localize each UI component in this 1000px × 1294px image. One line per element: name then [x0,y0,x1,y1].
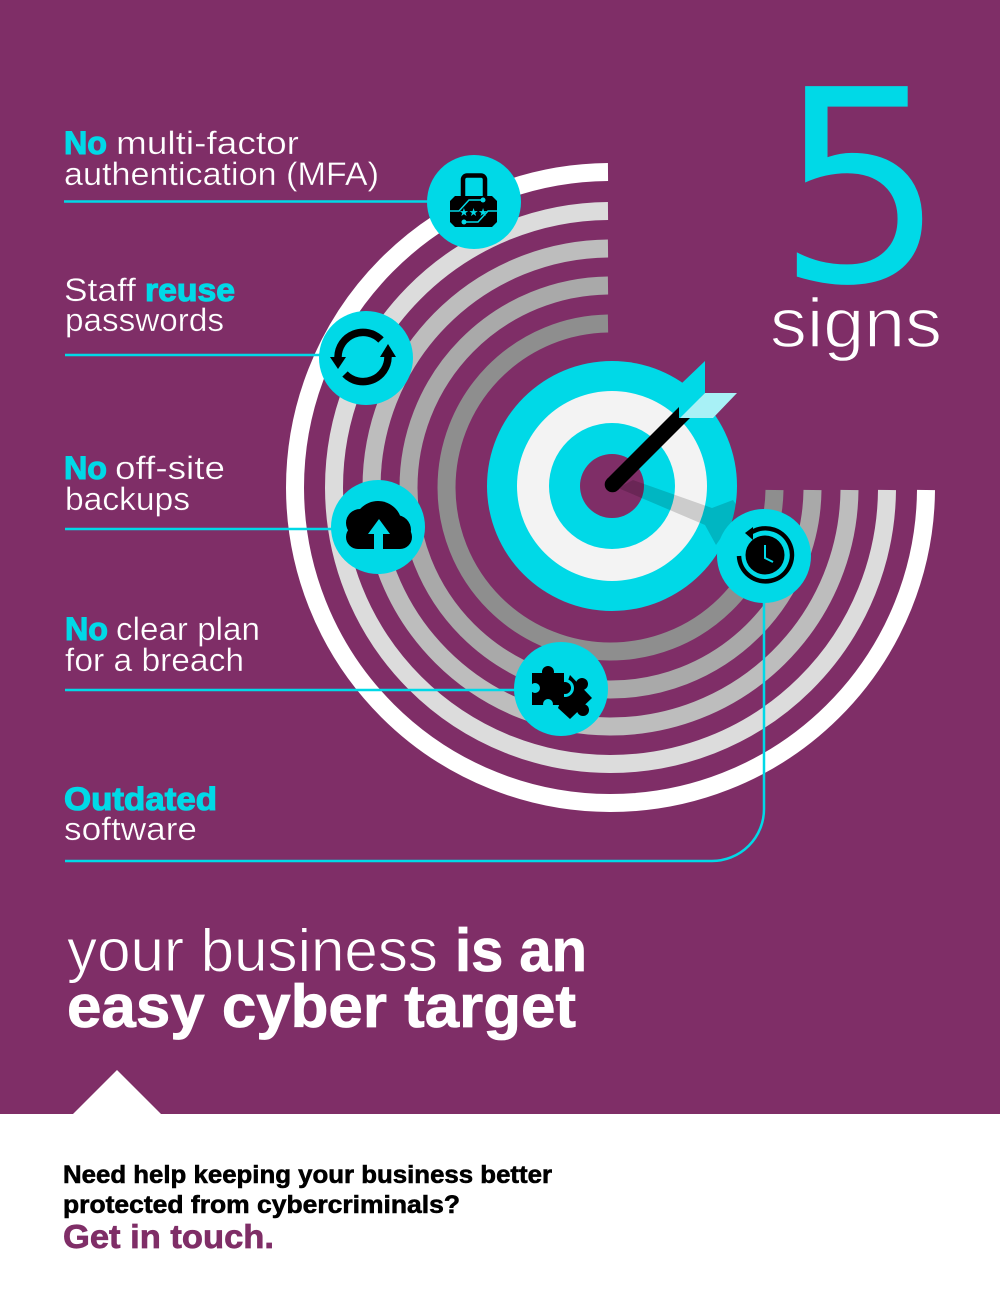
label: no clear plan for a breach: No [65,611,108,647]
label: no off-site backups: No [64,450,107,486]
icon: cloud upload [331,480,425,574]
call to action text [63,1161,552,1255]
label: no off-site backups [64,450,225,517]
call to action text: Get in touch. [63,1218,274,1255]
label: no off-site backups: backups [65,481,190,517]
footer panel [0,1070,1000,1294]
label: no clear plan for a breach [65,611,260,678]
label: no multi-factor authentication: multi-factor [116,125,299,161]
heading: 5 signs: 5 [775,31,947,346]
label: staff reuse passwords: reuse [145,272,235,308]
icon: sync arrows [319,311,413,405]
headline [67,917,587,1040]
headline: your business [67,917,438,984]
label: staff reuse passwords [64,272,235,338]
target and arrow [487,361,740,611]
label: no multi-factor authentication [64,125,379,192]
call to action text: protected from cybercriminals? [63,1191,460,1219]
label: outdated software [64,781,217,847]
icon: clock with history arrow [717,509,811,603]
connector lines [64,202,764,861]
label: no clear plan for a breach: for a breach [65,642,244,678]
icon: puzzle pieces [514,642,608,736]
label: staff reuse passwords: Staff [64,272,136,308]
label: staff reuse passwords: passwords [65,302,224,338]
label: no multi-factor authentication: No [64,125,107,161]
label: outdated software: Outdated [64,781,217,817]
concentric arcs chart [295,172,926,803]
call to action text: Need help keeping your business better [63,1161,552,1189]
label: no off-site backups: off-site [115,450,225,486]
label: no multi-factor authentication: authentication (MFA) [64,156,379,192]
icon: padlock with circuit: ★★★ [459,206,488,219]
label: outdated software: software [64,811,197,847]
icon: padlock with circuit [427,155,521,249]
heading: 5 signs: signs [770,284,942,362]
headline: is an [455,917,587,984]
label: no clear plan for a breach: clear plan [116,611,260,647]
headline: easy cyber target [67,973,576,1040]
